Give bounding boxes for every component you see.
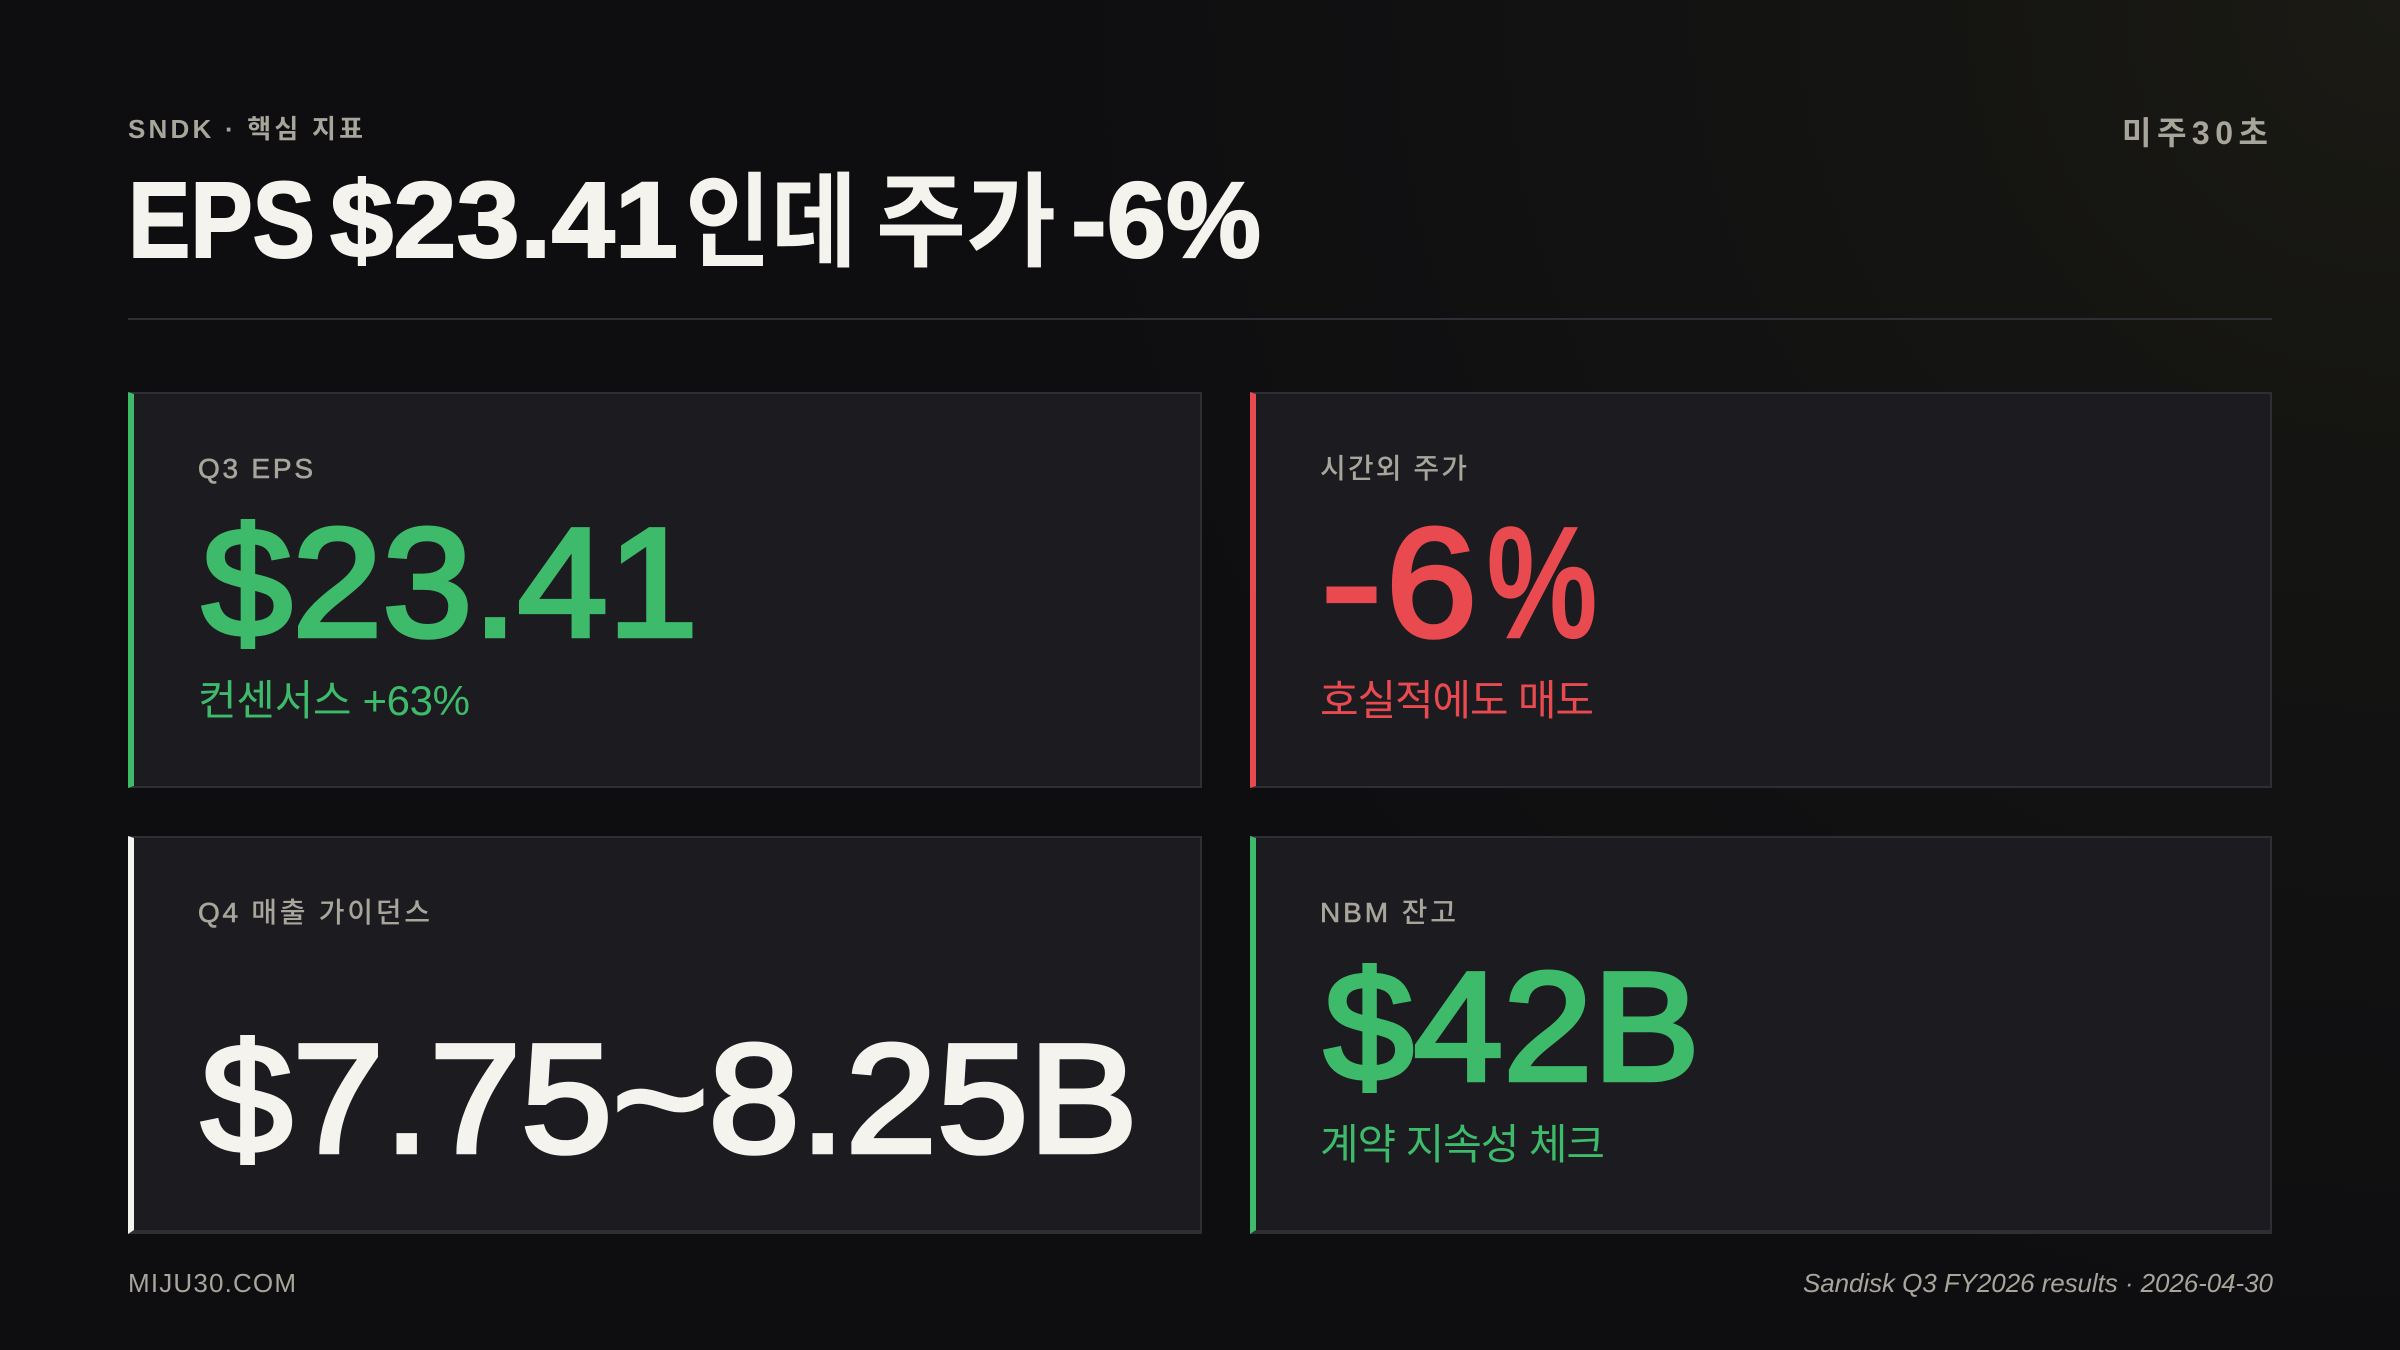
panel: Q3 EPS bbox=[128, 392, 1201, 788]
value: -6%: % bbox=[1487, 496, 1597, 669]
title: 주가 bbox=[876, 165, 1056, 280]
title: $23.41 bbox=[330, 159, 678, 280]
title: 인데 bbox=[685, 165, 857, 280]
label: Q4 매출 가이던스: Q4 매출 가이던스 bbox=[198, 897, 430, 928]
label: NBM 잔고: NBM 잔고 bbox=[1320, 897, 1456, 928]
brand tag: 미주30초: 미주30초 bbox=[2122, 115, 2268, 151]
footer: source: Sandisk Q3 FY2026 results · 2026-04-30 bbox=[1803, 1268, 2274, 1298]
header divider bbox=[128, 318, 2272, 320]
value: $42B: $42B bbox=[1324, 940, 1700, 1113]
title bbox=[128, 159, 1261, 280]
title: EPS bbox=[128, 159, 315, 280]
subtext: 호실적에도 매도: 호실적에도 매도 bbox=[1320, 677, 1594, 724]
eyebrow: SNDK 핵심 지표: SNDK · 핵심 지표 bbox=[128, 114, 363, 144]
subtext: 컨센서스 +63%: 컨센서스 +63% bbox=[198, 677, 470, 724]
value: $23.41: $23.41 bbox=[202, 496, 698, 669]
title: -6% bbox=[1071, 159, 1261, 280]
value: -6%: 6 bbox=[1386, 496, 1477, 669]
subtext: 계약 지속성 체크: 계약 지속성 체크 bbox=[1320, 1121, 1605, 1168]
value: -6%: - bbox=[1321, 496, 1382, 669]
footer: site: MIJU30.COM bbox=[128, 1268, 296, 1298]
label: 시간외 주가: 시간외 주가 bbox=[1320, 453, 1467, 484]
label: Q3 EPS: Q3 EPS bbox=[198, 453, 313, 484]
value: -6% bbox=[1321, 496, 1597, 669]
value: $7.75~8.25B: $7.75~8.25B bbox=[201, 1012, 1138, 1185]
panel: NBM backlog bbox=[1250, 836, 2272, 1234]
panel: after-hours price bbox=[1250, 392, 2271, 788]
panel: Q4 revenue guidance bbox=[128, 836, 1202, 1234]
